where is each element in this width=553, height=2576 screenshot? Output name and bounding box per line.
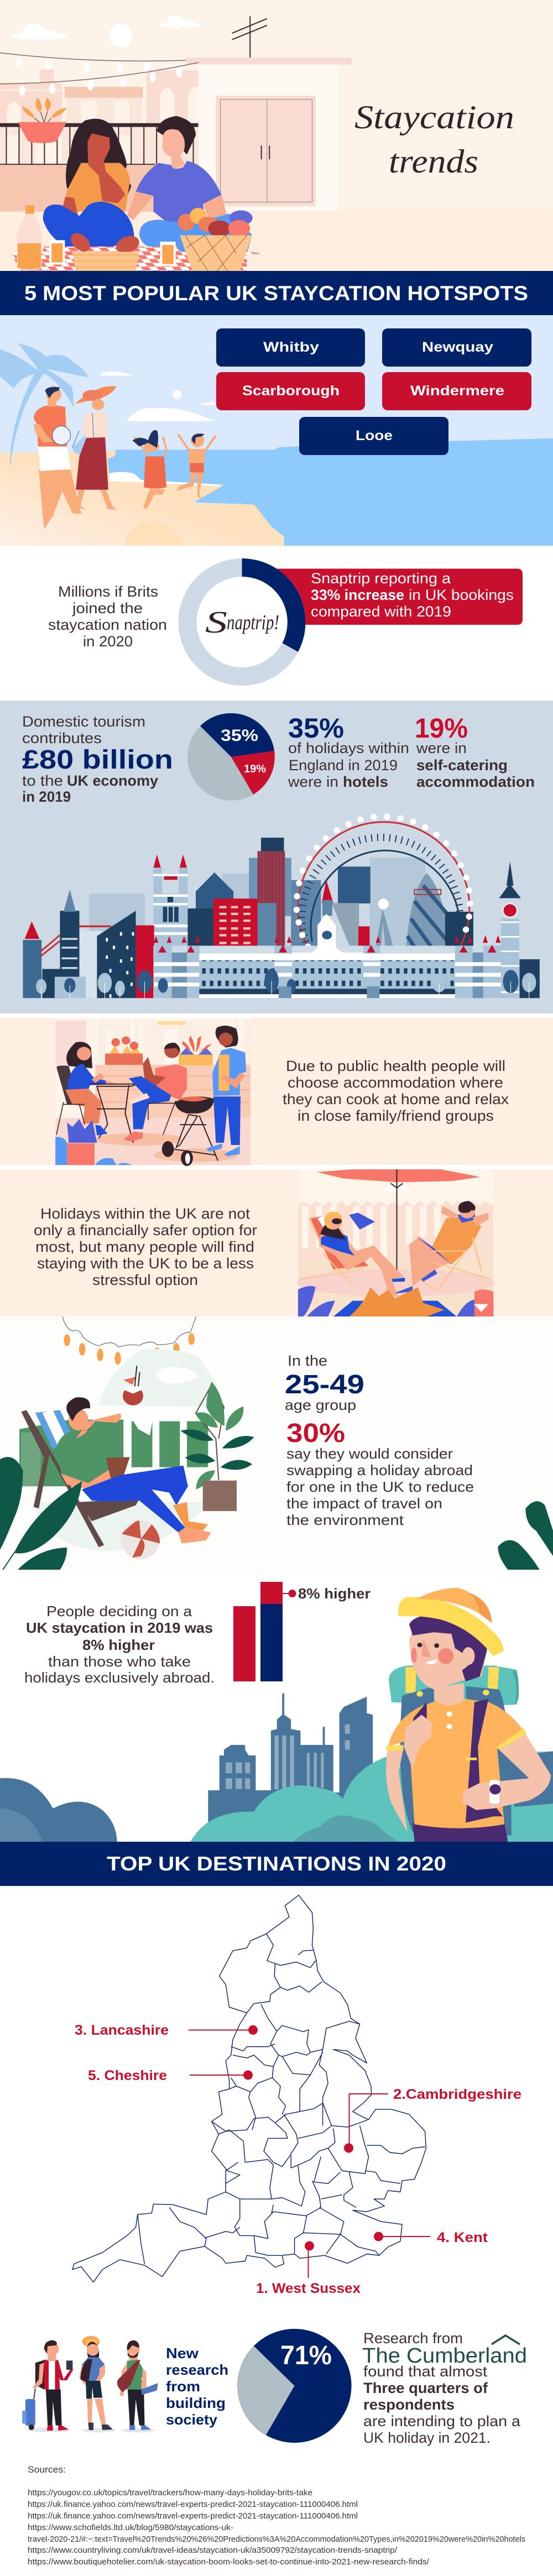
text: £80 billion: contributes: [22, 730, 102, 746]
stat: 19% self-catering: were in: [416, 740, 467, 756]
illustration: man on deckchair: [0, 1316, 553, 1570]
text: Cumberland research: Three quarters of: [363, 2380, 488, 2396]
text: £80 billion: Domestic tourism: [22, 713, 145, 730]
callout: 33% increase: Snaptrip reporting a: [311, 570, 451, 587]
panel: less stressful: [0, 1169, 553, 1316]
text: millions of Brits: in 2020: [83, 633, 133, 650]
text: financially safer: staying with the UK to be a less: [37, 1255, 254, 1272]
heading banner: top destinations: [0, 1842, 553, 1886]
heading banner: hotspots: 5 MOST POPULAR UK STAYCATION HOTSPOTS: [24, 282, 528, 305]
logo: Snaptrip: [205, 605, 279, 640]
logo: Snaptrip: S: [205, 605, 227, 640]
text: new research: research: [166, 2361, 228, 2378]
text: cook at home: Due to public health people will: [286, 1058, 505, 1074]
heading banner: top destinations: TOP UK DESTINATIONS IN 2020: [107, 1852, 446, 1875]
text: 25-49 age group: age group: [285, 1397, 356, 1413]
heading banner: hotspots: [0, 271, 553, 315]
stat: 35% hotels: 35%: [288, 713, 344, 744]
text: UK staycation 8% higher: holidays exclusively abroad.: [24, 1669, 215, 1686]
stat: 35% hotels: England in 2019: [289, 757, 398, 774]
pie chart: 71%: [238, 2329, 352, 2443]
illustration: sunbathing couple: [297, 1169, 494, 1316]
text: 25-49 age group: the impact of travel on: [286, 1495, 442, 1512]
text: 25-49 age group: 25-49: [285, 1370, 364, 1399]
illustration: city and backpacker: [0, 1588, 553, 1842]
button: Windermere: [382, 372, 531, 410]
text: millions of Brits: joined the: [72, 600, 143, 616]
text: 25-49 age group: the environment: [286, 1512, 404, 1528]
text: financially safer: [34, 1205, 257, 1288]
bar chart: 8% higher: [233, 1582, 371, 1681]
text: 25-49 age group: say they would consider: [286, 1445, 453, 1462]
button: Windermere: Windermere: [410, 383, 504, 399]
text: financially safer: stressful option: [92, 1272, 198, 1288]
text: UK staycation 8% higher: 8% higher: [82, 1637, 155, 1653]
text: financially safer: only a financially safer option for: [34, 1222, 257, 1239]
text: 25-49 age group: [285, 1352, 474, 1528]
callout: 33% increase: 33% increase: [311, 587, 404, 603]
title: [354, 99, 514, 180]
text: new research: [166, 2345, 228, 2428]
illustration: three travellers: [22, 2336, 158, 2432]
text: new research: from: [166, 2378, 200, 2395]
sources: https://www.boutiquehotelier.com/uk-staycation-boom-looks-set-to-continue-into-2021-new-research-finds/: [28, 2557, 430, 2567]
sources: https://www.schofields.ltd.uk/blog/5980/staycations-uk-: [28, 2523, 233, 2532]
text: cook at home: choose accommodation where: [288, 1074, 503, 1091]
text: £80 billion: UK economy: [67, 772, 158, 789]
text: Cumberland research: UK holiday in 2021.: [363, 2429, 491, 2446]
illustration: London skyline: [23, 814, 540, 998]
sources: [28, 2464, 525, 2567]
text: millions of Brits: staycation nation: [48, 616, 167, 633]
marker: Cheshire: 5. Cheshire: [88, 2068, 167, 2083]
button: Whitby: [216, 328, 365, 367]
stat: 19% self-catering: 19%: [415, 713, 468, 744]
pie chart: 35% and 19%: 19%: [244, 763, 266, 775]
sources: Sources:: [28, 2464, 66, 2475]
callout: 33% increase: compared with 2019: [311, 603, 451, 620]
illustration: barbecue with friends: [55, 1018, 251, 1166]
text: financially safer: most, but many people will find: [35, 1239, 254, 1255]
stat: 35% hotels: were in: [288, 774, 338, 790]
stat: 35% hotels: hotels: [343, 774, 388, 790]
sources: https://yougov.co.uk/topics/travel/trackers/how-many-days-holiday-brits-take: [28, 2488, 312, 2497]
map: England counties: [72, 1895, 426, 2282]
logo: Snaptrip: naptrip!: [227, 611, 279, 634]
marker: West Sussex: 1. West Sussex: [256, 2281, 361, 2296]
text: Cumberland research: are intending to plan a: [363, 2413, 521, 2429]
text: £80 billion: [22, 713, 173, 805]
illustration: family on beach: [0, 343, 553, 546]
stat: 19% self-catering: [415, 713, 535, 790]
text: cook at home: they can cook at home and relax: [283, 1091, 509, 1107]
marker: Lancashire: [75, 2023, 258, 2038]
button: Looe: Looe: [356, 428, 393, 443]
marker: Lancashire: 3. Lancashire: [75, 2023, 169, 2038]
button: Newquay: Newquay: [422, 339, 493, 355]
text: financially safer: Holidays within the UK are not: [40, 1205, 251, 1222]
title: Staycation: [354, 99, 514, 135]
text: new research: building: [166, 2395, 226, 2411]
panel: domestic tourism: [0, 701, 553, 1013]
panel: building society research: [22, 2329, 527, 2446]
title: trends: [389, 143, 478, 180]
panel: destinations map: [0, 1886, 553, 2306]
marker: Cambridgeshire: [344, 2087, 521, 2153]
marker: Kent: 4. Kent: [437, 2230, 488, 2245]
sources: https://uk.finance.yahoo.com/news/travel-experts-predict-2021-staycation-111000406.html: [28, 2500, 358, 2509]
text: Cumberland research: respondents: [363, 2396, 455, 2413]
text: £80 billion: in 2019: [22, 788, 71, 805]
button: Scarborough: Scarborough: [242, 383, 340, 399]
text: 25-49 age group: 30%: [286, 1419, 345, 1448]
marker: Cheshire: [88, 2068, 253, 2083]
marker: West Sussex: [256, 2241, 361, 2296]
callout: 33% increase: [275, 568, 523, 625]
callout: 33% increase: in UK bookings: [409, 587, 514, 603]
text: UK staycation 8% higher: than those who take: [48, 1653, 191, 1670]
text: 25-49 age group: for one in the UK to reduce: [286, 1478, 474, 1495]
text: millions of Brits: Millions if Brits: [58, 583, 158, 600]
sources: https://www.countryliving.com/uk/travel-ideas/staycation-uk/a35009792/staycation-trends-snaptrip/: [28, 2546, 398, 2555]
sources: https://uk.finance.yahoo.com/news/travel-experts-predict-2021-staycation-111000406.html: [28, 2511, 358, 2521]
text: 25-49 age group: In the: [288, 1352, 327, 1369]
panel: Snaptrip: [0, 546, 553, 701]
button: Looe: [299, 417, 448, 455]
pie chart: 35% and 19%: [187, 713, 275, 801]
marker: Cambridgeshire: 2.Cambridgeshire: [393, 2087, 521, 2102]
pie chart: 35% and 19%: 35%: [221, 727, 258, 745]
donut chart: 33%: [187, 558, 305, 677]
text: cook at home: [283, 1058, 509, 1124]
text: UK staycation 8% higher: UK staycation in 2019 was: [26, 1619, 213, 1636]
text: Cumberland research: [362, 2330, 527, 2446]
panel: 25-49 age group: [0, 1316, 553, 1570]
button: Scarborough: [216, 372, 365, 410]
panel: beach hotspots: [0, 315, 553, 546]
stat: 35% hotels: of holidays within: [288, 740, 409, 756]
panel: hero: [0, 0, 553, 271]
logo: The Cumberland: The Cumberland: [362, 2344, 527, 2368]
panel: 8% higher: [0, 1570, 553, 1842]
text: £80 billion: to the: [22, 772, 63, 789]
text: 25-49 age group: swapping a holiday abroad: [286, 1462, 473, 1478]
text: cook at home: in close family/friend groups: [298, 1107, 494, 1124]
text: Cumberland research: Research from: [363, 2330, 463, 2347]
text: UK staycation 8% higher: [24, 1603, 215, 1686]
sources: travel-2020-21/#:~:text=Travel%20Trends%20%26%20Predictions%3A%20Accommodation%20Types,in%202019%20were%20in%20hotels: [28, 2535, 525, 2544]
stat: 19% self-catering: accommodation: [416, 774, 535, 790]
marker: Kent: [374, 2230, 488, 2245]
bar chart: 8% higher: 8% higher: [298, 1585, 371, 1602]
stat: 19% self-catering: self-catering: [416, 757, 508, 774]
panel: cook at home: [0, 1018, 553, 1166]
text: new research: New: [166, 2345, 199, 2361]
illustration: couple picnic on terrace: [0, 15, 553, 271]
logo: The Cumberland: [362, 2335, 527, 2368]
stat: 35% hotels: [288, 713, 409, 790]
button: Newquay: [382, 328, 531, 367]
text: £80 billion: £80 billion: [22, 745, 173, 775]
text: Cumberland research: found that almost: [363, 2363, 488, 2380]
text: UK staycation 8% higher: People deciding on a: [46, 1603, 192, 1619]
text: millions of Brits: [48, 583, 167, 650]
button: Whitby: Whitby: [263, 339, 319, 355]
pie chart: 71%: 71%: [280, 2341, 332, 2370]
text: new research: society: [166, 2411, 218, 2428]
